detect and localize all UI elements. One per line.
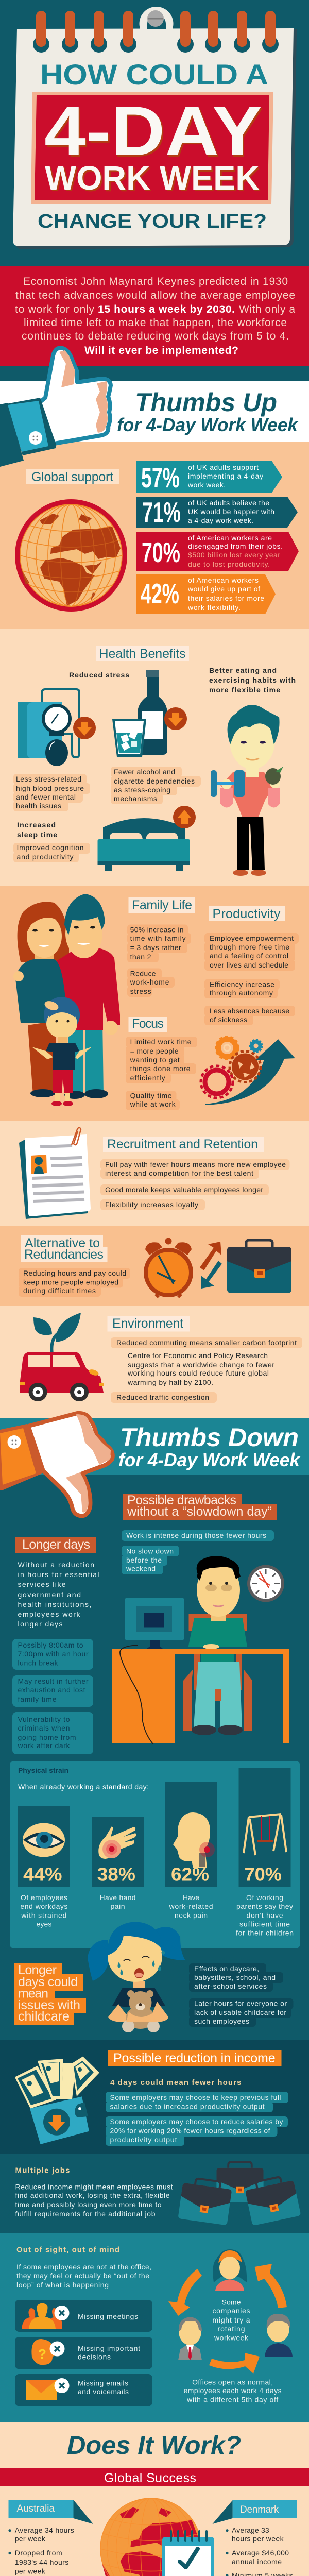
stat arrow: 70%: 70% xyxy=(142,536,180,568)
text: rotating workweek: rotating xyxy=(217,2325,245,2333)
icon: alarm clock xyxy=(144,1238,193,1297)
box: missing emails xyxy=(15,2374,152,2406)
banner: global success xyxy=(0,2468,309,2486)
text: longer days explanation: employees work xyxy=(18,1610,80,1618)
stat arrow: 42% xyxy=(136,574,276,614)
text: offices open: employees each work 4 days xyxy=(184,2386,282,2395)
labels: strain captions: with strained xyxy=(21,1911,66,1920)
tag: possible drawbacks: without a “slowdown day” xyxy=(127,1504,272,1519)
box: exhaustion: exhaustion and lost xyxy=(18,1686,85,1694)
tag: australia: Australia xyxy=(16,2503,55,2514)
stat arrow: 42%: their salaries for more xyxy=(188,594,264,602)
tag: possible drawbacks: Possible drawbacks xyxy=(127,1493,236,1507)
labels: strain captions: for their children xyxy=(236,1929,294,1937)
list: denmark: Average $46,000 xyxy=(232,2549,289,2557)
box: vulnerability: work after dark xyxy=(18,1741,70,1750)
stat arrow: 70% xyxy=(136,532,299,571)
stat arrow: 70%: $500 billion lost every year xyxy=(188,551,280,559)
pills: dependencies text xyxy=(111,767,201,804)
section: alternative to redundancies xyxy=(0,1226,309,1306)
bar: 70% swing xyxy=(239,1768,290,1887)
pills: quality time: Quality time xyxy=(130,1091,172,1099)
labels: strain captions: don’t have xyxy=(246,1911,283,1920)
label: better eating: more flexible time xyxy=(209,686,280,694)
section: thumbs down xyxy=(0,1413,309,2040)
tag: alternative to redundancies xyxy=(21,1235,107,1262)
pills: focus text: = more people xyxy=(130,1047,179,1055)
icon: car with plant xyxy=(20,1313,104,1401)
tag: possible drawbacks xyxy=(123,1493,277,1520)
text: longer days explanation xyxy=(18,1561,99,1628)
text: longer days explanation: longer days xyxy=(18,1620,63,1628)
intro panel: With only a xyxy=(239,303,295,315)
box: missing meetings xyxy=(15,2300,152,2332)
labels: strain captions: end workdays xyxy=(20,1902,67,1910)
heading: out of sight: Out of sight, out of mind xyxy=(16,2246,119,2255)
text: multiple jobs: time and possibly losing even more time to xyxy=(15,2200,162,2209)
pills: efficiency: through autonomy xyxy=(210,989,273,997)
pills: quality time: while at work xyxy=(130,1100,176,1108)
text: out of the loop: loop” of what is happening xyxy=(16,2281,109,2289)
pills: daycare effects xyxy=(189,1963,283,1992)
pills: sleep text: and productivity xyxy=(16,853,73,861)
list: australia: per week xyxy=(15,2535,46,2543)
section: thumbs up xyxy=(0,348,309,629)
tag: longer days: Longer days xyxy=(22,1537,90,1552)
stat arrow: 57%: of UK adults support xyxy=(188,463,259,471)
icon: blood pressure monitor xyxy=(18,689,96,766)
labels: strain captions: Of working xyxy=(246,1893,283,1902)
heading: physical strain: Physical strain xyxy=(18,1766,68,1774)
heading: does it work: Does It Work? xyxy=(67,2431,241,2460)
pills: dependencies text: as stress-coping xyxy=(114,786,170,794)
pills: later hours: Later hours for everyone or xyxy=(194,1999,287,2007)
labels: strain captions: Of employees xyxy=(21,1893,67,1902)
section: family, productivity and focus xyxy=(0,886,309,1121)
icon: bed xyxy=(98,806,196,871)
pills: family text: = 3 days rather xyxy=(130,943,181,952)
text: centre for economic research: Centre for Economic and Policy Research xyxy=(128,1351,268,1360)
icon: thumbs up hand xyxy=(0,348,111,467)
pills: drawbacks: weekend xyxy=(126,1564,156,1572)
intro panel: limited time left to make that happen, the workforce xyxy=(24,317,287,329)
tag: childcare xyxy=(14,1963,86,2025)
list: australia: Dropped from xyxy=(15,2549,62,2557)
subheading: fewer hours: 4 days could mean fewer hours xyxy=(110,2078,241,2087)
list: denmark xyxy=(226,2526,295,2576)
text: offices open: with a different 5th day off xyxy=(186,2396,278,2404)
stat arrow: 57%: implementing a 4-day xyxy=(188,472,263,480)
box: missing meetings: Missing meetings xyxy=(78,2312,138,2320)
heading: thumbs down: for 4-Day Work Week xyxy=(118,1449,301,1470)
box: exhaustion xyxy=(12,1675,93,1707)
pills: drawbacks: Work is intense during those fewer hours xyxy=(126,1531,266,1539)
text: out of the loop xyxy=(16,2263,151,2289)
pill: commuting: Reduced commuting means smaller carbon footprint xyxy=(116,1338,297,1347)
text: centre for economic research: working hours could reduce future global xyxy=(127,1369,269,1377)
bar: 70% swing: 70% xyxy=(244,1864,282,1885)
labels: strain captions: parents say they xyxy=(236,1902,293,1910)
pills: productivity text: Employee empowerment xyxy=(210,934,294,942)
pills: focus text: things done more xyxy=(130,1064,191,1073)
box: missing decisions: decisions xyxy=(78,2353,111,2361)
calendar page xyxy=(13,7,297,249)
list: australia: per week xyxy=(15,2567,46,2575)
box: exhaustion: May result in further xyxy=(18,1677,89,1685)
tag: childcare: mean xyxy=(18,1987,48,2001)
pills: focus text: Limited work time xyxy=(130,1038,192,1046)
list: denmark: hours per week xyxy=(232,2535,284,2543)
heading: multiple jobs: Multiple jobs xyxy=(15,2166,70,2175)
pills: blood pressure text: and fewer mental xyxy=(16,793,76,801)
tag: childcare: issues with xyxy=(18,1998,80,2012)
stat arrow: 70%: of American workers are xyxy=(188,534,272,542)
text: longer days explanation: Without a reduction xyxy=(18,1561,94,1569)
heading: thumbs up xyxy=(117,388,299,435)
pills: blood pressure text: health issues xyxy=(16,802,61,810)
label: increased sleep time: sleep time xyxy=(17,831,57,839)
tag: global support: Global support xyxy=(31,470,113,484)
icon: wallet with money xyxy=(15,2057,99,2144)
box: vulnerability: criminals when xyxy=(18,1724,70,1732)
illustration: family xyxy=(13,894,120,1106)
pills: daycare effects: Effects on daycare, xyxy=(194,1964,259,1973)
panel: physical strain xyxy=(10,1761,300,1948)
text: rotating workweek: might try a xyxy=(212,2316,250,2324)
pill: traffic xyxy=(111,1392,217,1403)
pills: redundancies text: Reducing hours and pay could xyxy=(23,1269,126,1277)
stat arrow: 57% xyxy=(136,461,282,494)
tag: childcare: Longer xyxy=(18,1963,57,1977)
pills: efficiency: Efficiency increase xyxy=(210,980,274,988)
icon: man with dumbbell and apple xyxy=(211,705,283,876)
tag: alternative to redundancies: Redundancies xyxy=(24,1247,104,1262)
title box: 4-day work week: 4-DAY xyxy=(46,93,264,172)
label: better eating xyxy=(209,666,296,694)
text: rotating workweek: workweek xyxy=(214,2334,249,2342)
label: increased sleep time: Increased xyxy=(17,821,56,829)
box: vulnerability: Vulnerability to xyxy=(18,1715,70,1723)
pills: recruitment text: interest and competition for the best talent xyxy=(105,1169,253,1177)
stat arrow: 42%: of American workers xyxy=(188,576,259,584)
tag: environment: Environment xyxy=(112,1316,183,1331)
pills: daycare effects: after-school services xyxy=(194,1982,267,1990)
icon: briefcase xyxy=(227,1240,291,1293)
box: missing decisions: Missing important xyxy=(78,2344,140,2352)
text: centre for economic research: warming by half by 2100. xyxy=(127,1378,213,1386)
pills: dependencies text: mechanisms xyxy=(114,794,157,803)
pill: traffic: Reduced traffic congestion xyxy=(116,1393,209,1401)
intro panel: that tech advances would allow the average employee xyxy=(15,290,295,301)
tag: childcare: childcare xyxy=(18,2009,70,2024)
labels: strain captions: eyes xyxy=(36,1920,52,1928)
tag: recruitment and retention: Recruitment and Retention xyxy=(107,1137,258,1151)
section: recruitment and retention xyxy=(0,1121,309,1226)
stat arrow: 57%: 57% xyxy=(141,462,180,494)
pills: absences: Less absences because xyxy=(210,1007,289,1015)
text: offices open: Offices open as normal, xyxy=(192,2378,273,2386)
text: offices open xyxy=(184,2378,282,2404)
list: australia xyxy=(8,2526,74,2576)
text: longer days explanation: health institutions, xyxy=(18,1600,92,1608)
stat arrow: 71%: 71% xyxy=(142,496,181,528)
box: possibly 8am to 7pm xyxy=(12,1639,93,1670)
stat arrow: 70%: disengaged from their jobs. xyxy=(188,542,283,550)
tag: denmark: Denmark xyxy=(240,2504,279,2515)
pills: salaries: Some employers may choose to reduce salaries by xyxy=(110,2117,283,2126)
pills: recruitment text xyxy=(100,1159,289,1210)
pills: drawbacks: No slow down xyxy=(126,1547,174,1555)
pills: dependencies text: Fewer alcohol and xyxy=(114,768,175,776)
box: missing decisions xyxy=(15,2337,152,2369)
pills: work-home stress xyxy=(127,969,175,997)
stat arrow: 42%: work flexibility. xyxy=(187,603,241,612)
box: exhaustion: family time xyxy=(18,1695,57,1703)
illustration: crying girl with teddy xyxy=(88,1922,185,2032)
labels: strain captions: pain xyxy=(110,1902,125,1910)
stat arrow: 71% xyxy=(136,496,298,528)
labels: strain captions: neck pain xyxy=(175,1911,208,1920)
icon: globe with calendar xyxy=(100,2498,214,2576)
section: possible reduction in income xyxy=(0,2040,309,2154)
text: multiple jobs: find additional work, losing the extra, flexible xyxy=(15,2191,170,2199)
header: calendar xyxy=(0,0,309,266)
text: rotating workweek: Some xyxy=(221,2298,241,2306)
labels: strain captions: Have xyxy=(183,1893,199,1902)
heading: thumbs down: Thumbs Down xyxy=(120,1423,299,1452)
bar: 38% hand: 38% xyxy=(97,1864,135,1885)
title box: 4-day work week: 4-DAY xyxy=(44,92,262,170)
stat arrow: 57%: work week. xyxy=(187,481,226,489)
pills: drawbacks xyxy=(122,1530,274,1574)
label: better eating: Better eating and xyxy=(209,666,277,674)
pills: family text: time with family xyxy=(130,934,186,942)
pills: family text xyxy=(127,924,191,962)
pills: salaries: Some employers may choose to keep previous full xyxy=(110,2093,281,2102)
intro panel: continues to debate reducing work days from 5 to 4. xyxy=(22,330,289,342)
pills: blood pressure text xyxy=(13,774,90,811)
tag: childcare: days could xyxy=(18,1975,78,1989)
heading: thumbs down xyxy=(118,1423,301,1470)
pills: redundancies text: keep more people employed xyxy=(23,1278,118,1286)
pills: work-home stress: stress xyxy=(130,987,151,995)
pills: daycare effects: babysitters, school, and xyxy=(194,1973,276,1981)
pills: salaries: productivity output xyxy=(110,2136,177,2144)
tag: focus: Focus xyxy=(132,1016,164,1031)
text: longer days explanation: in hours for essential xyxy=(18,1570,99,1579)
pills: family text: 50% increase in xyxy=(130,925,184,934)
stat arrow: 42%: would give up part of xyxy=(187,585,260,593)
pills: quality time xyxy=(126,1091,180,1110)
pills: redundancies text xyxy=(19,1268,130,1297)
section: out of sight xyxy=(0,2233,309,2422)
title box: 4-day work week xyxy=(31,92,273,204)
bar: 62% neck xyxy=(165,1782,217,1887)
label: increased sleep time xyxy=(17,821,57,839)
list: denmark: Average 33 xyxy=(232,2526,269,2534)
bar: 44% eyes xyxy=(18,1806,70,1887)
text: multiple jobs: fulfill requirements for the additional job xyxy=(15,2210,156,2218)
title box: 4-day work week: WORK WEEK xyxy=(46,160,261,198)
tag: health benefits: Health Benefits xyxy=(99,647,185,661)
pills: blood pressure text: high blood pressure xyxy=(16,784,84,792)
pills: productivity text: and a feeling of control xyxy=(210,952,288,960)
box: vulnerability xyxy=(12,1712,93,1754)
tag: family life: Family Life xyxy=(132,898,192,912)
text: centre for economic research: suggests that a worldwide change to fewer xyxy=(128,1361,274,1369)
box: missing decisions: ? xyxy=(38,2346,46,2362)
pills: efficiency xyxy=(204,979,280,998)
pills: focus text: wanting to get xyxy=(130,1056,180,1064)
pills: work-home stress: work-home xyxy=(130,978,169,986)
title: change your life: CHANGE YOUR LIFE? xyxy=(38,211,267,232)
pills: focus text: efficiently xyxy=(130,1074,165,1082)
intro panel: Economist John Maynard Keynes predicted in 1930 xyxy=(23,276,288,287)
pills: dependencies text: cigarette dependencies xyxy=(114,777,195,785)
stat arrow: 42%: 42% xyxy=(141,578,179,609)
labels: strain captions: sufficient time xyxy=(239,1920,290,1928)
tag: productivity: Productivity xyxy=(212,907,281,921)
list: australia: 1983's 44 hours xyxy=(15,2558,68,2566)
list: denmark: annual income xyxy=(232,2557,282,2566)
stat arrow: 71%: UK would be happier with xyxy=(188,507,274,516)
heading: thumbs up: Thumbs Up xyxy=(135,388,277,417)
pills: salaries: salaries due to increased productivity output xyxy=(110,2102,265,2110)
intro panel xyxy=(0,266,309,366)
stat arrow: 71%: a 4-day work week. xyxy=(188,516,253,524)
text: longer days explanation: government and xyxy=(18,1590,81,1599)
intro panel: Will it ever be implemented? xyxy=(84,345,238,357)
pills: productivity text: over lives and schedule xyxy=(210,961,288,969)
pills: redundancies text: during difficult times xyxy=(23,1286,96,1295)
label: reduced stress: Reduced stress xyxy=(69,671,129,679)
intro panel: to work for only xyxy=(15,303,95,315)
pills: blood pressure text: Less stress-related xyxy=(16,775,81,783)
banner: global success: Global Success xyxy=(104,2471,196,2485)
tag: denmark xyxy=(212,2500,297,2524)
illustration: rotating workweek xyxy=(168,2249,293,2374)
heading: thumbs up: for 4-Day Work Week xyxy=(117,414,299,435)
bar: 62% neck: 62% xyxy=(171,1864,209,1885)
pills: salaries: 20% for working 20% fewer hours regardless of xyxy=(110,2127,270,2135)
pills: salaries xyxy=(106,2092,288,2146)
pills: family text: than 2 xyxy=(130,953,151,961)
labels: strain captions: work-related xyxy=(169,1902,213,1910)
section: health benefits xyxy=(0,629,309,886)
pills: recruitment text: Full pay with fewer hours means more new employee xyxy=(105,1160,286,1168)
icon: globe xyxy=(15,499,127,612)
icon: alcohol bottle and glass xyxy=(112,670,187,757)
list: australia: Average 34 hours xyxy=(15,2526,74,2534)
pills: later hours: lack of usable childcare for xyxy=(194,2008,286,2016)
pills: later hours xyxy=(189,1998,294,2027)
bar: 44% eyes: 44% xyxy=(23,1864,62,1885)
pills: drawbacks: before the xyxy=(126,1556,162,1564)
pills: later hours: such employees xyxy=(194,2017,249,2025)
tag: possible reduction in income: Possible reduction in income xyxy=(113,2051,276,2065)
stat arrow: 70%: due to lost productivity. xyxy=(188,560,270,568)
pills: absences: of sickness xyxy=(210,1015,247,1024)
bar: 38% hand xyxy=(92,1817,144,1887)
section: does it work xyxy=(0,2422,309,2576)
intro panel: 15 hours a week by 2030. xyxy=(98,303,235,315)
pills: recruitment text: Good morale keeps valuable employees longer xyxy=(105,1185,263,1194)
box: possibly 8am to 7pm: lunch break xyxy=(18,1659,59,1667)
icon: swap arrows xyxy=(200,1242,222,1289)
section: environment xyxy=(0,1306,309,1418)
illustration: tired worker at desk xyxy=(112,1556,289,1744)
text: centre for economic research xyxy=(127,1351,274,1386)
title: how could a: HOW COULD A xyxy=(40,58,268,91)
box: missing emails: Missing emails xyxy=(78,2379,128,2387)
pills: productivity text xyxy=(204,933,299,971)
label: better eating: exercising habits with xyxy=(209,676,296,684)
icon: thumbs down hand xyxy=(0,1413,113,1516)
icon: three briefcases xyxy=(178,2162,301,2226)
box: missing emails: and voicemails xyxy=(78,2387,129,2396)
box: vulnerability: going home from xyxy=(18,1733,76,1741)
section: multiple jobs xyxy=(0,2154,309,2233)
text: multiple jobs xyxy=(15,2183,173,2218)
pills: absences xyxy=(204,1006,295,1025)
pills: productivity text: through more free time xyxy=(210,943,289,951)
pills: focus text xyxy=(126,1037,197,1083)
icon: resume xyxy=(19,1127,91,1219)
pills: work-home stress: Reduce xyxy=(130,970,156,978)
labels: strain captions: Have hand xyxy=(100,1893,136,1902)
tag: australia xyxy=(8,2500,93,2524)
tag: alternative to redundancies: Alternative to xyxy=(25,1236,100,1250)
icon: gears and rising arrow xyxy=(201,1037,295,1105)
stat arrow: 71%: of UK adults believe the xyxy=(188,499,269,507)
text: rotating workweek: companies xyxy=(212,2307,250,2315)
text: standard day: When already working a standard day: xyxy=(18,1783,149,1791)
text: multiple jobs: Reduced income might mean employees must xyxy=(15,2183,173,2191)
text: longer days explanation: services like xyxy=(18,1580,66,1588)
pills: sleep text: Improved cognition xyxy=(16,843,83,852)
text: out of the loop: they may feel or actually be “out of the xyxy=(16,2272,149,2280)
text: out of the loop: If some employees are not at the office, xyxy=(16,2263,151,2271)
pills: sleep text xyxy=(13,843,90,862)
box: possibly 8am to 7pm: 7:00pm with an hour xyxy=(18,1650,89,1658)
labels: strain captions xyxy=(20,1893,294,1937)
title box: 4-day work week: WORK WEEK xyxy=(45,159,260,197)
box: possibly 8am to 7pm: Possibly 8:00am to xyxy=(18,1641,83,1649)
pills: recruitment text: Flexibility increases loyalty xyxy=(105,1200,198,1209)
text: rotating workweek xyxy=(212,2298,250,2342)
